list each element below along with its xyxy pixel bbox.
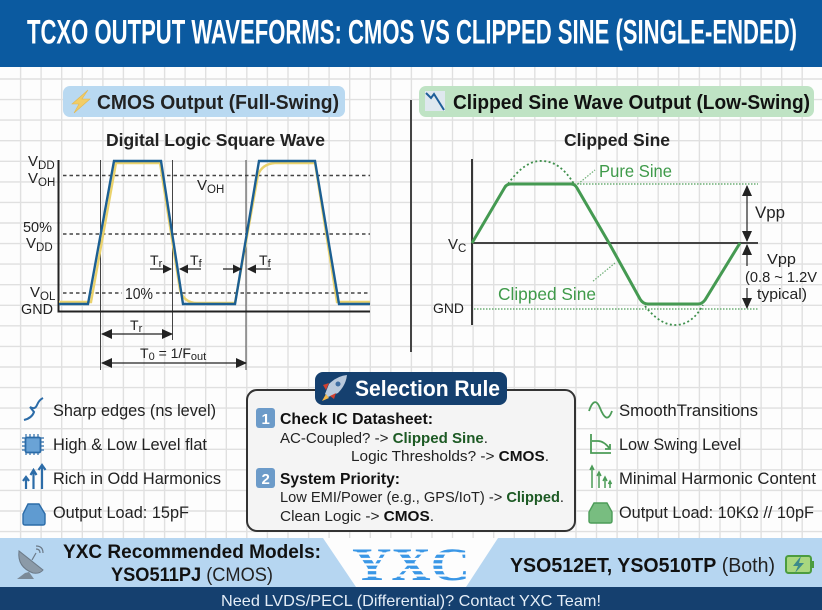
footer: Need LVDS/PECL (Differential)? Contact YXC Team!: [221, 593, 601, 610]
rule 2: Low EMI/Power (e.g., GPS/IoT) -> Clipped.: [280, 489, 564, 506]
timing labels: r: [159, 258, 163, 270]
rule 1: Check IC Datasheet:: [280, 411, 433, 428]
labels: clipped sine chart: typical): [757, 287, 807, 303]
labels: clipped sine chart: Pure Sine: [599, 161, 672, 181]
heading: CMOS output: [63, 86, 345, 117]
models: CMOS: YXC Recommended Models:: [63, 541, 321, 563]
recommended models banner: [0, 538, 822, 591]
axis labels: voltage levels: GND: [21, 301, 53, 318]
timing labels: T: [140, 345, 149, 361]
panel: clipped sine output: [419, 86, 817, 325]
axis labels: voltage levels: OH: [207, 184, 224, 196]
rule 1: Logic Thresholds? -> CMOS.: [351, 448, 549, 465]
labels: clipped sine chart: Vpp: [767, 251, 796, 268]
chart title: square wave: Digital Logic Square Wave: [106, 130, 325, 150]
icon: chip: [22, 434, 44, 455]
chart: square wave: [58, 160, 370, 370]
heading: selection rule: [315, 372, 507, 405]
divider: [410, 100, 412, 352]
heading: clipped sine: [419, 86, 814, 117]
axis labels: voltage levels: DD: [38, 160, 55, 172]
heading: clipped sine: Clipped Sine Wave Output (Low-Swing): [453, 92, 810, 114]
axis labels: voltage levels: DD: [36, 242, 53, 254]
axis labels: voltage levels: OL: [40, 291, 56, 303]
title banner: [0, 0, 822, 67]
axis labels: voltage levels: V: [28, 170, 38, 187]
timing labels: T: [190, 252, 199, 268]
feature: harmonics: Rich in Odd Harmonics: [53, 470, 221, 488]
axis labels: voltage levels: V: [30, 284, 40, 301]
rule 2: [256, 468, 564, 525]
panel: CMOS output: [21, 86, 370, 370]
timing labels: f: [268, 258, 272, 270]
feature: harmonic content: Minimal Harmonic Content: [619, 470, 816, 488]
timing labels: T: [150, 252, 159, 268]
timing labels: = 1/F: [155, 345, 191, 361]
axis labels: voltage levels: 10%: [125, 286, 153, 303]
axis labels: voltage levels: V: [28, 153, 38, 170]
list: CMOS features: [22, 398, 221, 525]
panel: selection rule: [247, 372, 575, 531]
timing labels: T: [130, 317, 139, 333]
timing labels: r: [139, 323, 143, 335]
labels: clipped sine chart: GND: [433, 300, 464, 316]
timing labels: out: [191, 351, 206, 363]
timing labels: f: [199, 258, 203, 270]
icon: battery: [786, 556, 814, 573]
icon: satellite dish: [17, 546, 43, 579]
icon: harmonics: [23, 465, 46, 489]
axis labels: voltage levels: V: [197, 177, 207, 194]
feature: output load: Output Load: 15pF: [53, 504, 189, 522]
rule 2: System Priority:: [280, 471, 400, 488]
icon: sharp edge: [24, 398, 43, 420]
chart: clipped sine wave: [472, 159, 758, 325]
list: clipped sine features: [589, 402, 816, 523]
footer: [0, 587, 822, 610]
rule 1: [256, 408, 549, 465]
icon: rocket: [322, 375, 347, 401]
icon: load: [589, 503, 612, 523]
labels: clipped sine chart: (0.8 ~ 1.2V: [745, 270, 817, 286]
axis labels: voltage levels: OH: [38, 177, 55, 189]
heading: CMOS output: CMOS Output (Full-Swing): [97, 92, 339, 114]
labels: clipped sine chart: Clipped Sine: [498, 284, 596, 304]
logo: YXC: YXC: [352, 539, 470, 591]
icon: smooth sine: [589, 402, 612, 418]
axis labels: voltage levels: 50%: [23, 219, 52, 236]
models: CMOS: YSO511PJ (CMOS): [111, 564, 273, 586]
rule 2: 2: [262, 471, 270, 488]
feature: output load: Output Load: 10KΩ // 10pF: [619, 504, 814, 522]
feature: flat levels: High & Low Level flat: [53, 436, 207, 454]
rule 1: 1: [262, 411, 270, 428]
icon: load: [23, 504, 45, 525]
labels: clipped sine chart: [433, 161, 817, 316]
labels: clipped sine chart: V: [448, 236, 458, 253]
feature: smooth transitions: SmoothTransitions: [619, 402, 758, 420]
rule 1: AC-Coupled? -> Clipped Sine.: [280, 430, 488, 447]
rule 2: Clean Logic -> CMOS.: [280, 508, 434, 525]
chart title: clipped sine: Clipped Sine: [564, 130, 670, 150]
timing labels: [130, 252, 272, 363]
axis labels: voltage levels: [21, 153, 224, 318]
icon: low swing: [591, 434, 611, 453]
labels: clipped sine chart: Vpp: [755, 203, 785, 222]
heading: selection rule: Selection Rule: [355, 376, 500, 401]
timing labels: T: [259, 252, 268, 268]
feature: sharp edges: Sharp edges (ns level): [53, 402, 216, 420]
labels: clipped sine chart: C: [458, 243, 466, 255]
models: CMOS: [63, 541, 321, 586]
feature: low swing: Low Swing Level: [619, 436, 741, 454]
icon: minimal harmonics: [590, 466, 612, 488]
axis labels: voltage levels: V: [26, 235, 36, 252]
models: both: YSO512ET, YSO510TP (Both): [510, 554, 775, 577]
timing labels: 0: [149, 351, 155, 363]
